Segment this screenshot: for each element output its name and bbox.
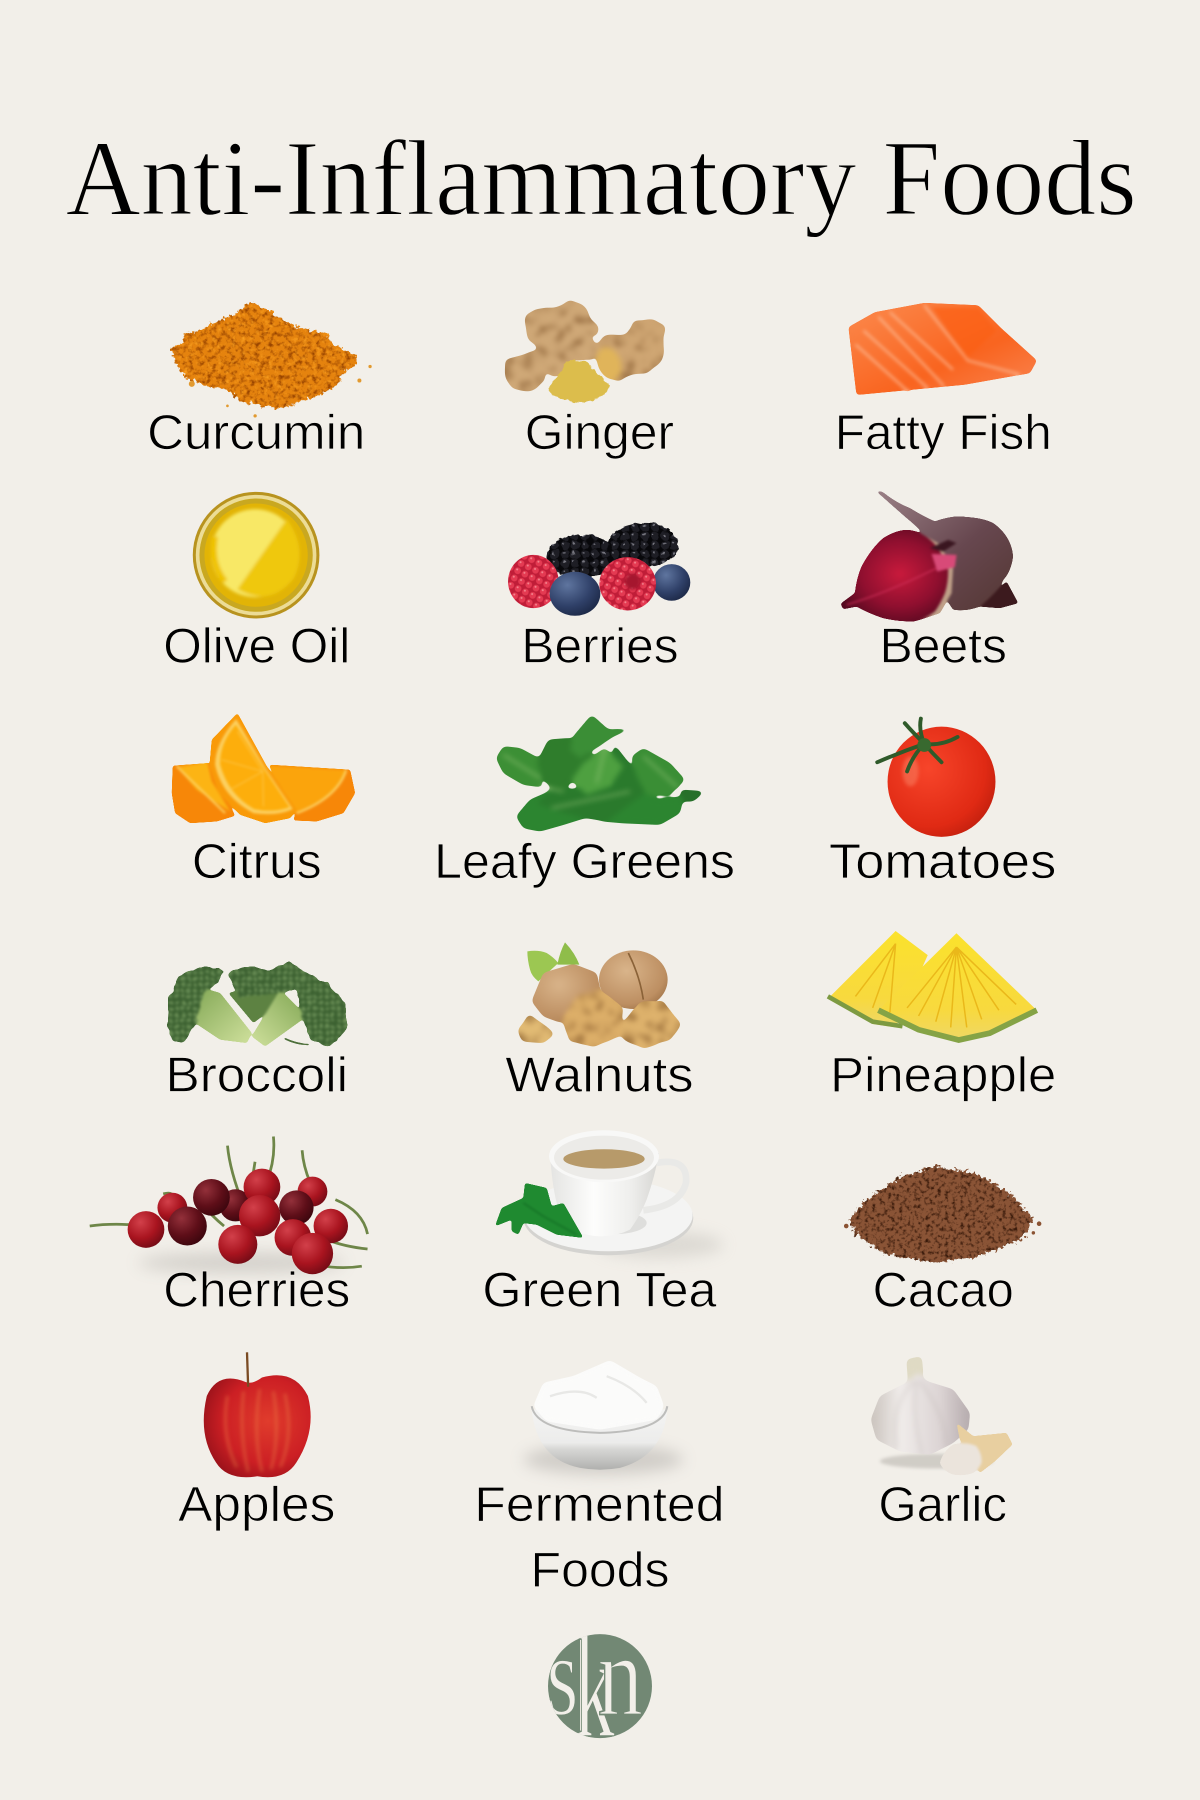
icon: pineapple wedges [828, 931, 1037, 1042]
label: Berries: Berries [521, 618, 679, 673]
label: Garlic: Garlic [878, 1477, 1007, 1532]
label: Tomatoes: Tomatoes [829, 834, 1056, 889]
label: Fatty Fish: Fatty Fish [835, 405, 1052, 460]
icon: cup of green tea [495, 1130, 723, 1258]
label: Walnuts: Walnuts [505, 1048, 694, 1103]
icon: mixed berries [508, 523, 690, 616]
label: Leafy Greens: Leafy Greens [434, 834, 735, 889]
icon: orange wedges [172, 713, 355, 823]
label: Pineapple: Pineapple [830, 1048, 1056, 1103]
panel: Olive Oil [163, 492, 350, 673]
icon: cherries [90, 1136, 368, 1274]
icon: garlic bulb and cloves [871, 1356, 1013, 1475]
icon: beets [841, 491, 1018, 621]
icon: walnuts [517, 942, 682, 1048]
label: Olive Oil: Olive Oil [163, 618, 350, 673]
logo: skn monogram: s [547, 1611, 578, 1740]
label: Beets: Beets [880, 618, 1007, 673]
label: Broccoli: Broccoli [165, 1048, 348, 1103]
panel: Broccoli [165, 961, 348, 1103]
panel: Fatty Fish [835, 303, 1052, 460]
icon: red apple [204, 1352, 311, 1477]
title: Anti-Inflammatory Foods [66, 120, 1137, 239]
label: Cherries: Cherries [163, 1262, 350, 1317]
label: Citrus: Citrus [192, 834, 322, 889]
infographic canvas [67, 139, 1132, 1738]
panel: Apples [178, 1352, 335, 1532]
icon: curcumin powder pile [170, 301, 372, 418]
icon: cacao powder pile [844, 1166, 1041, 1263]
panel: Fermented Foods [474, 1360, 725, 1597]
panel: Garlic [871, 1356, 1013, 1532]
label: Apples: Apples [178, 1477, 335, 1532]
logo: skn monogram: k [574, 1606, 615, 1768]
panel: Curcumin [147, 301, 372, 460]
label: Ginger: Ginger [525, 405, 674, 460]
panel: Ginger [505, 300, 674, 460]
icon: bowl of olive oil [193, 492, 319, 618]
panel: Berries [508, 523, 690, 673]
logo: skn monogram: n [598, 1612, 643, 1740]
panel: Green Tea [482, 1130, 723, 1317]
label: Fermented Foods [474, 1477, 725, 1597]
label: Green Tea: Green Tea [482, 1262, 717, 1317]
icon: bowl of yogurt [523, 1360, 683, 1475]
logo: skn monogram [548, 1634, 652, 1738]
panel: Tomatoes [829, 719, 1056, 889]
panel: Citrus [172, 713, 355, 889]
label: Fermented Foods: Foods [531, 1542, 669, 1597]
panel: Leafy Greens [434, 715, 735, 889]
icon: tomato [877, 719, 995, 837]
panel: Cherries [90, 1136, 368, 1317]
icon: spinach leaves [496, 715, 705, 831]
label: Cacao: Cacao [873, 1262, 1014, 1317]
icon: salmon fillet [849, 303, 1037, 395]
icon: ginger root [505, 300, 665, 403]
panel: Walnuts [505, 942, 694, 1103]
label: Curcumin: Curcumin [147, 405, 365, 460]
label: Fermented Foods: Fermented [474, 1477, 725, 1532]
panel: Pineapple [828, 931, 1056, 1103]
panel: Beets [841, 491, 1018, 673]
icon: broccoli [167, 961, 347, 1046]
panel: Cacao [844, 1166, 1041, 1317]
